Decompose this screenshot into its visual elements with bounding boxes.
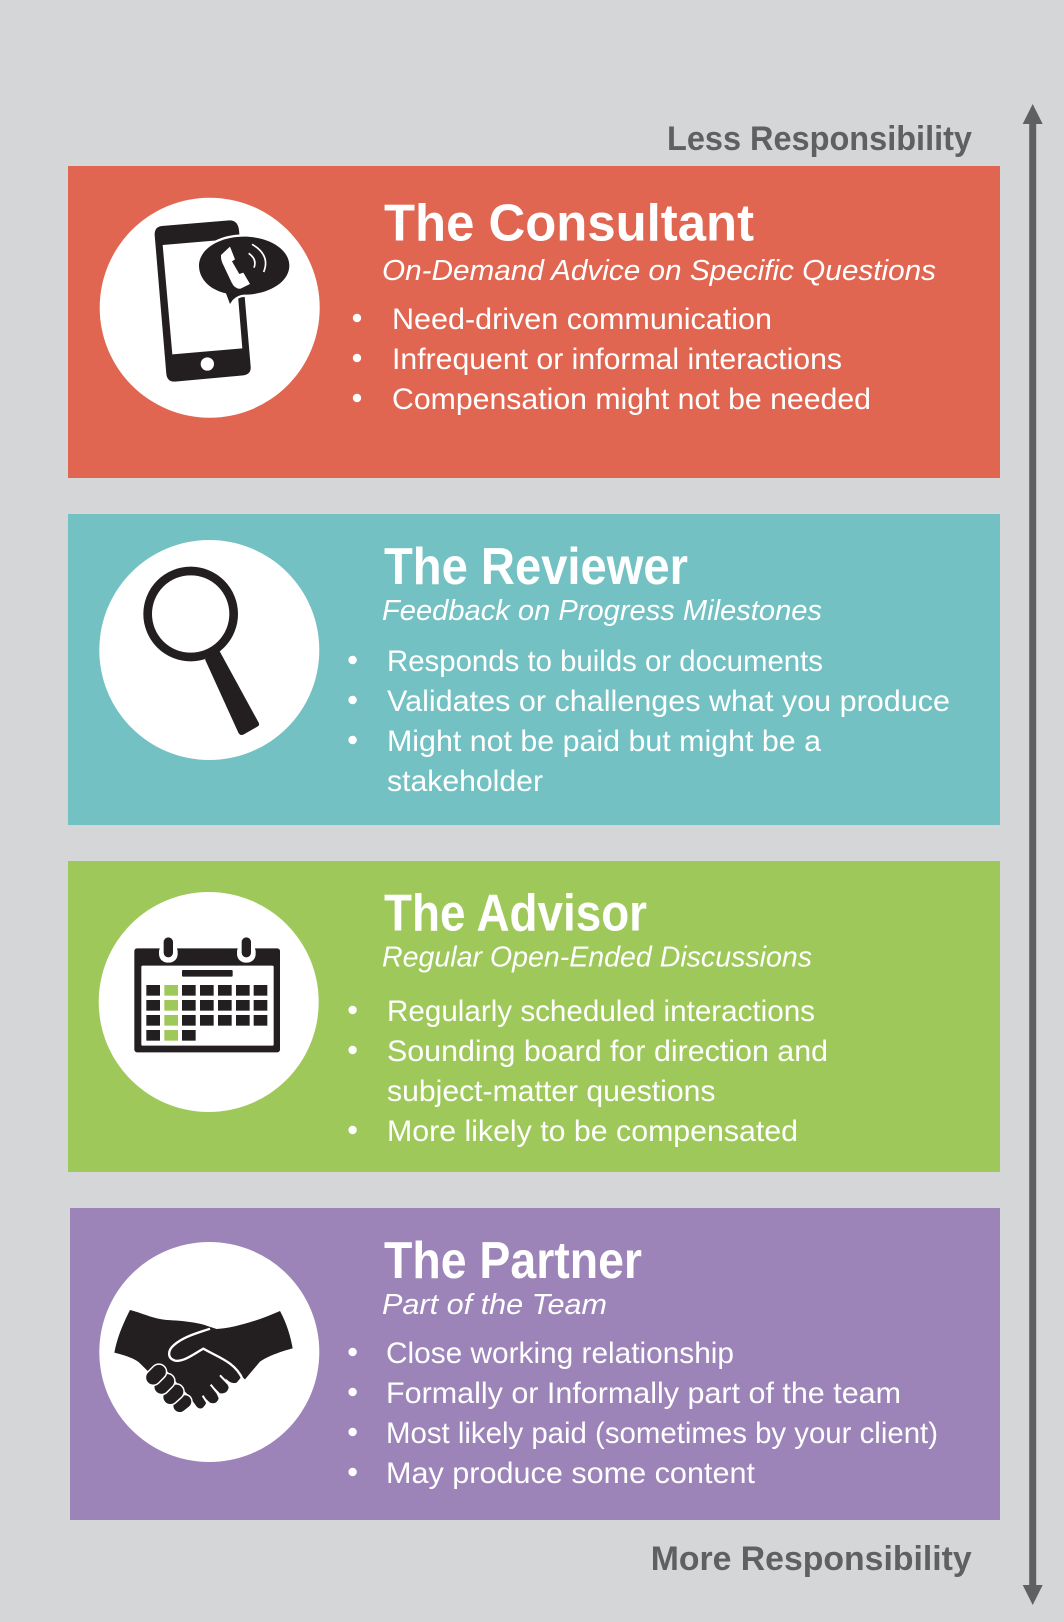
panel: the consultant xyxy=(68,166,1000,478)
subtitle: On-Demand Advice on Specific Questions xyxy=(382,255,936,287)
heading: the partner: The Partner xyxy=(384,1232,642,1290)
panel: the reviewer xyxy=(68,514,1000,825)
bullet list: Regularly scheduled interactions xyxy=(387,995,815,1028)
bullet list: More likely to be compensated xyxy=(387,1115,798,1148)
bullet list: Compensation might not be needed xyxy=(392,383,871,416)
bullet list xyxy=(348,995,828,1148)
bullet list: Infrequent or informal interactions xyxy=(392,343,842,376)
heading: the reviewer: The Reviewer xyxy=(384,538,688,596)
subtitle: Feedback on Progress Milestones xyxy=(382,595,822,627)
bullet list xyxy=(353,303,871,416)
bullet list: Might not be paid but might be a xyxy=(387,725,821,758)
bullet list xyxy=(348,1337,938,1490)
subtitle: Part of the Team xyxy=(382,1289,607,1321)
panel: the partner xyxy=(70,1208,1000,1520)
icon: calendar xyxy=(99,892,319,1112)
subtitle: Regular Open-Ended Discussions xyxy=(382,942,812,974)
icon: phone with call bubble xyxy=(100,198,320,418)
bullet list: Most likely paid (sometimes by your client) xyxy=(386,1417,938,1450)
heading: the consultant: The Consultant xyxy=(384,195,754,253)
heading: the advisor: The Advisor xyxy=(384,884,647,942)
bullet list: Close working relationship xyxy=(386,1337,734,1370)
bullet list: Formally or Informally part of the team xyxy=(386,1377,901,1410)
icon: magnifying glass xyxy=(99,540,319,760)
bullet list: Validates or challenges what you produce xyxy=(387,685,950,718)
bullet list: Sounding board for direction and xyxy=(387,1035,828,1068)
bullet list: subject-matter questions xyxy=(387,1075,716,1108)
bullet list xyxy=(348,645,950,798)
bullet list: May produce some content xyxy=(386,1457,756,1490)
arrow: responsibility scale xyxy=(1023,104,1043,1605)
bullet list: Responds to builds or documents xyxy=(387,645,823,678)
panel: the advisor xyxy=(68,861,1000,1172)
bullet list: Need-driven communication xyxy=(392,303,772,336)
label: less responsibility: Less Responsibility xyxy=(667,120,972,158)
icon: handshake xyxy=(99,1242,319,1462)
label: more responsibility: More Responsibility xyxy=(651,1540,972,1578)
bullet list: stakeholder xyxy=(387,765,543,798)
